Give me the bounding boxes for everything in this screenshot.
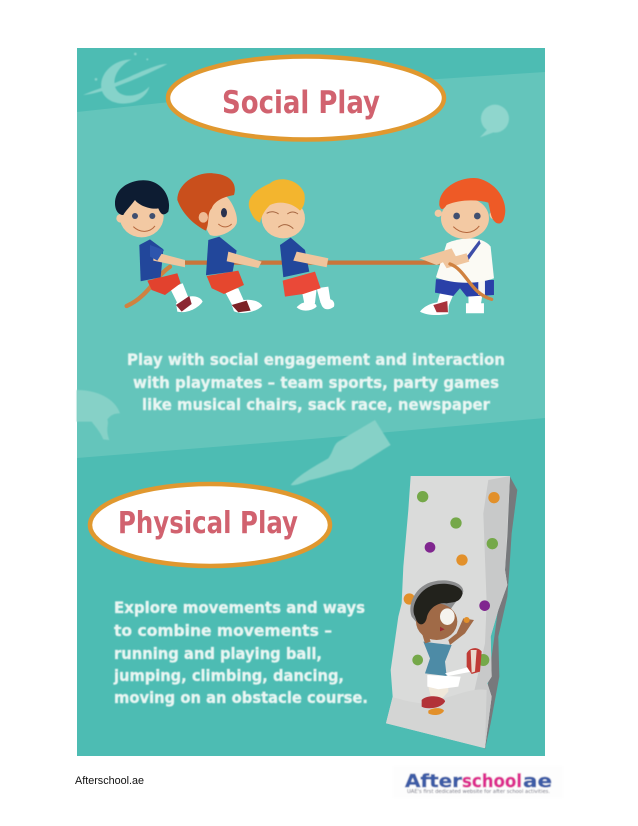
illustration: climbing wall (386, 476, 517, 749)
text: physical play description: moving on an obstacle course. (114, 688, 368, 707)
boy 2 auburn hair (177, 173, 262, 313)
rope (127, 263, 443, 306)
icon: planet (83, 53, 167, 104)
text: physical play description: to combine movements – (114, 621, 332, 640)
text: physical play description (113, 598, 368, 707)
text: social play description: with playmates – team sports, party games (133, 373, 499, 392)
logo: Afterschool.ae: school (462, 771, 522, 792)
text: social play description (127, 350, 505, 414)
logo: Afterschool.ae: ae (523, 771, 552, 792)
oval: Social Play heading (168, 56, 444, 140)
heading: Physical Play: Physical Play (118, 506, 298, 541)
illustration: tug of war (115, 173, 505, 315)
icon: jellyfish silhouette (77, 390, 120, 440)
text: physical play description: jumping, climbing, dancing, (113, 666, 344, 685)
oval: Physical Play heading (90, 484, 330, 566)
logo: Afterschool.ae: UAE's first dedicated website for after school activities. (407, 789, 550, 795)
boy 4 orange hair (419, 178, 505, 315)
boy 1 black hair (115, 180, 203, 312)
text: social play description: Play with social engagement and interaction (127, 350, 505, 369)
footer text: Afterschool.ae (75, 775, 144, 787)
text: physical play description: running and playing ball, (114, 644, 322, 663)
boy 3 blond hair (249, 179, 334, 311)
wall (480, 477, 517, 749)
logo: Afterschool.ae: After (405, 771, 462, 792)
climbing boy (410, 580, 482, 715)
logo: Afterschool.ae (393, 766, 563, 798)
panel: teal background (77, 48, 545, 756)
holds (404, 491, 500, 666)
text: physical play description: Explore movements and ways (114, 598, 365, 617)
icon: bottle silhouette (291, 420, 391, 485)
text: social play description: like musical chairs, sack race, newspaper (142, 395, 490, 414)
heading: Social Play: Social Play (222, 85, 380, 121)
icon: speech bubble (480, 105, 509, 137)
